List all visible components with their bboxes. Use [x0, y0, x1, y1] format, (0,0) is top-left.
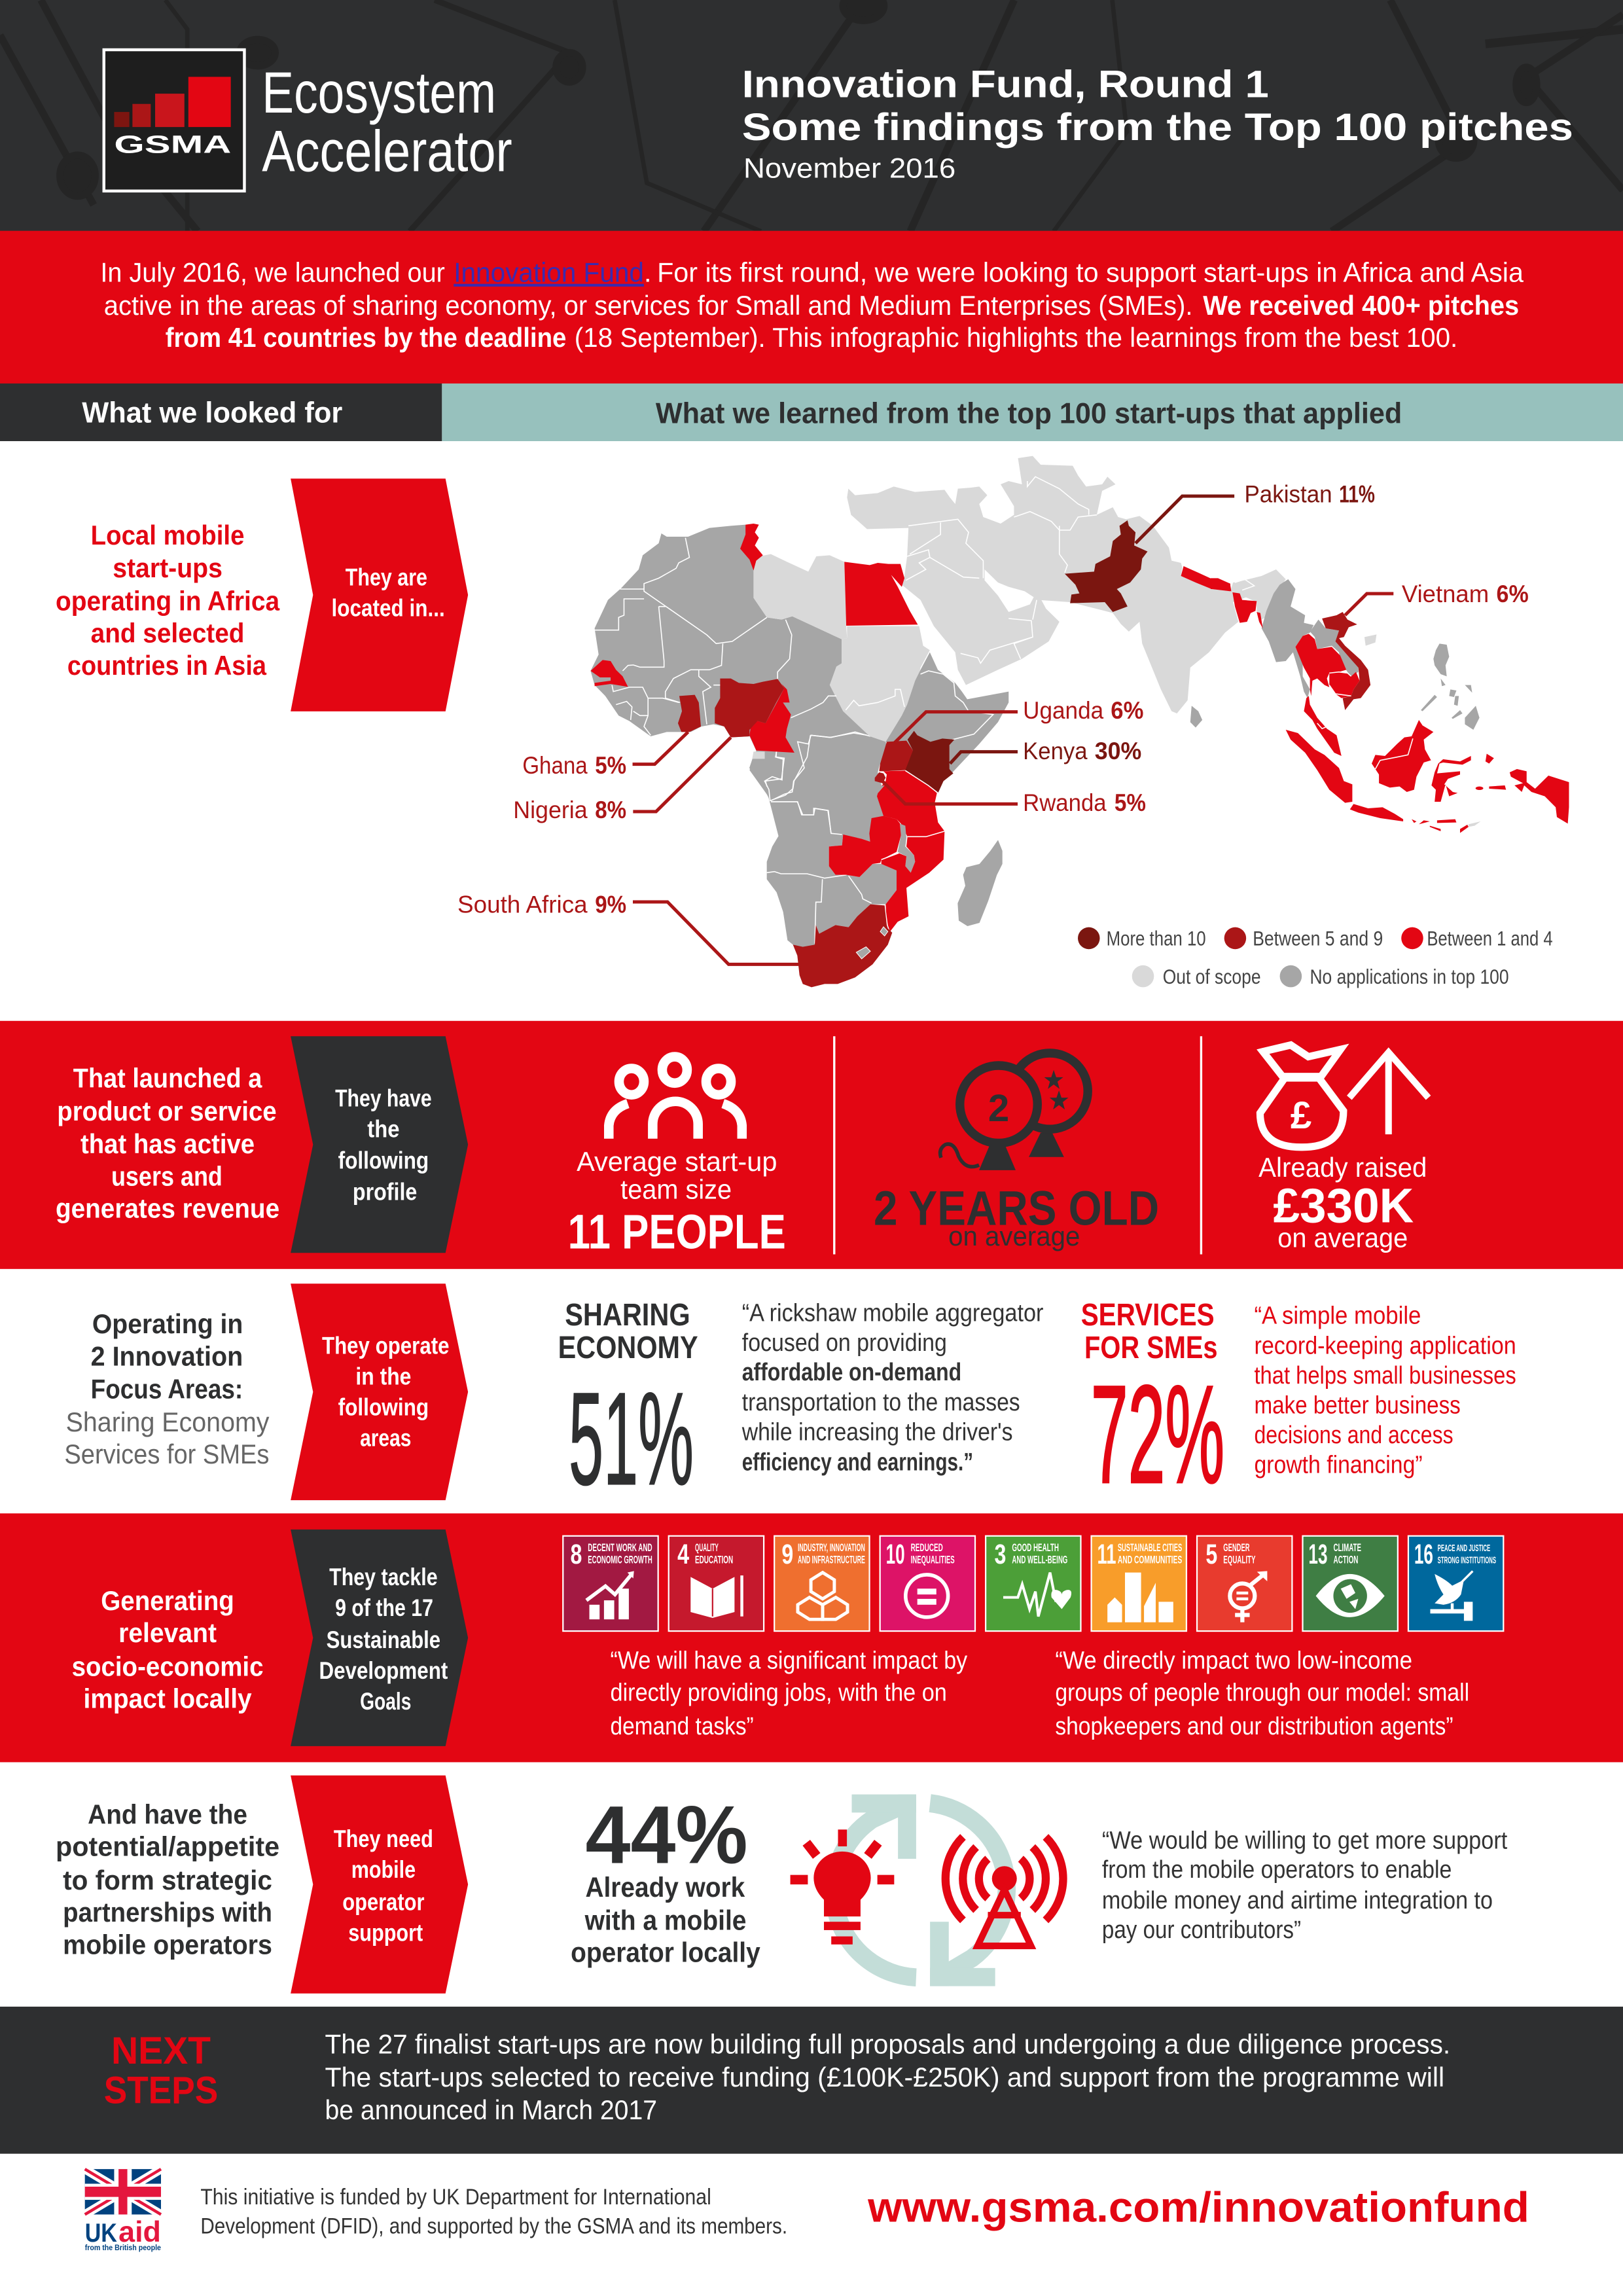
SDG tile 8 — [563, 1536, 658, 1631]
logo: GSMA — [104, 50, 244, 191]
quote: record-keeping application: record-keeping application — [1254, 1333, 1516, 1360]
map: East Africa and Horn — [885, 520, 1230, 774]
stat: already raised: £330K — [1274, 1178, 1414, 1232]
row 3: focus areas — [64, 1283, 1516, 1513]
criterion text: socio-economic impact — [72, 1586, 264, 1714]
next steps text: The 27 finalist start-ups are now building full proposals and undergoing a due diligence process. — [325, 2029, 1450, 2059]
quote: impact by providing jobs: “We will have a significant impact by — [611, 1647, 967, 1674]
SDG tile 3 — [986, 1536, 1080, 1631]
stat: average team size — [568, 1147, 786, 1259]
map: North and West Africa, no applications — [590, 525, 897, 838]
criterion text: partnerships with operators: to form strategic — [63, 1865, 272, 1895]
logo: UK aid: from the British people — [85, 2243, 161, 2252]
quote: record-keeping application: growth financing” — [1254, 1452, 1423, 1479]
logo: GSMA: GSMA — [114, 132, 231, 159]
quote: two low-income groups — [1055, 1647, 1469, 1740]
SDG tile 4: QUALITY — [695, 1541, 719, 1554]
SDG tile 13: 13 — [1308, 1539, 1328, 1570]
stat: 44% — [571, 1789, 760, 1969]
map labels: 8% — [595, 797, 626, 823]
criterion text: launched a product: generates revenue — [56, 1194, 279, 1224]
arrow: they operate in the following areas: in the — [355, 1363, 411, 1390]
criterion text: innovation focus areas: Operating in — [92, 1309, 243, 1339]
SDG tile 16 — [1408, 1536, 1503, 1631]
row 3: focus areas: 72% — [1091, 1357, 1224, 1513]
logo wordmark: Ecosystem Accelerator: Accelerator — [262, 118, 512, 184]
SDG tile 10: 10 — [886, 1539, 905, 1570]
intro band: Innovation Fund — [454, 258, 644, 288]
arrow: they tackle 9 of the 17 goals: They tackle — [329, 1564, 438, 1590]
map legend: More than 10 — [1107, 927, 1206, 950]
quote: two low-income groups: “We directly impact two low-income — [1055, 1647, 1412, 1674]
quote: mobile operators support — [1102, 1827, 1508, 1944]
next steps text: The start-ups selected to receive funding (£100K-£250K) and support from the programme will — [325, 2062, 1444, 2092]
stat: services for SMEs 72% — [1081, 1297, 1224, 1513]
map legend: Between 1 and 4 — [1427, 927, 1553, 950]
quote: mobile operators support: from the mobile operators to enable — [1102, 1856, 1452, 1884]
logo: UK aid: UK — [85, 2218, 117, 2248]
quote: rickshaw aggregator: efficiency and earnings.” — [742, 1449, 973, 1477]
arrow: they have the following profile: the — [367, 1116, 399, 1143]
criterion text: launched a product: that has active — [80, 1129, 255, 1159]
quote: rickshaw aggregator — [741, 1299, 1044, 1477]
quote: record-keeping application — [1254, 1302, 1516, 1479]
quote: record-keeping application: “A simple mobile — [1254, 1302, 1421, 1330]
intro band: active in the areas of sharing economy, or services for Small and Medium Enterprises (SMEs). — [104, 291, 1193, 321]
intro band: . — [644, 258, 651, 288]
arrow: they have the following profile: profile — [353, 1179, 417, 1206]
map labels: Rwanda — [1023, 789, 1107, 816]
map: African countries by application count — [590, 524, 930, 833]
map: Middle East and South Asia, out of scope — [847, 456, 1257, 713]
SDG tile 10 — [880, 1536, 975, 1631]
SDG tile 4 — [669, 1536, 764, 1631]
arrow: they are located in — [291, 478, 468, 711]
criterion text: innovation focus areas: Services for SMEs — [64, 1439, 269, 1469]
arrow: they operate in the following areas: areas — [360, 1424, 411, 1451]
criterion text: innovation focus areas — [64, 1309, 270, 1469]
criterion text: innovation focus areas: Sharing Economy — [66, 1407, 270, 1437]
criterion text: launched a product: product or service — [57, 1096, 277, 1126]
intro band — [0, 231, 1623, 384]
SDG tile 3: GOOD HEALTH — [1012, 1541, 1059, 1554]
criterion text: socio-economic impact: relevant — [118, 1618, 217, 1648]
SDG tile 11: SUSTAINABLE CITIES — [1118, 1541, 1182, 1554]
arrow: they have the following profile: They have — [335, 1085, 432, 1112]
map of Africa and Asia — [590, 456, 1569, 987]
arrow: they have the following profile: following — [338, 1147, 429, 1174]
intro band: (18 September). This infographic highlights the learnings from the best 100. — [575, 323, 1457, 353]
heading: next steps: STEPS — [104, 2069, 218, 2111]
stat: already raised: on average — [1277, 1223, 1408, 1253]
SDG tile 16: PEACE AND JUSTICE — [1438, 1543, 1490, 1554]
stat: 44%: Already work — [585, 1873, 745, 1903]
row 4: sustainable development goals — [0, 1513, 1623, 1762]
criterion text: partnerships with operators: And have the — [88, 1799, 247, 1829]
arrow: they need mobile operator support — [291, 1776, 468, 1994]
quote: mobile operators support: mobile money and airtime integration to — [1102, 1887, 1493, 1914]
stat: 44%: with a mobile — [584, 1905, 746, 1936]
criterion text: innovation focus areas: 2 Innovation — [91, 1341, 243, 1371]
map labels: 30% — [1095, 738, 1141, 764]
SDG tile 5 — [1197, 1536, 1292, 1631]
row 5: partnerships — [56, 1776, 1508, 1994]
quote: rickshaw aggregator: transportation to the masses — [742, 1389, 1020, 1416]
funding statement: This initiative is funded by UK Department for International — [200, 2185, 711, 2210]
intro band: In July 2016, we launched our — [100, 258, 445, 288]
criterion text: launched a product — [56, 1064, 279, 1224]
arrow: they are located in: They are — [346, 564, 427, 590]
SDG tile 8: 8 — [570, 1539, 582, 1570]
quote: rickshaw aggregator: while increasing the driver's — [741, 1418, 1012, 1446]
arrow: they tackle 9 of the 17 goals: Sustainable — [327, 1626, 440, 1653]
arrow: they have the following profile — [291, 1036, 468, 1253]
SDG tile 9: 9 — [781, 1539, 793, 1570]
stat: 44%: operator locally — [571, 1938, 760, 1969]
map labels: Ghana — [522, 752, 588, 779]
section header: what we looked for: What we looked for — [82, 397, 342, 429]
icon: two balloons: 2 — [988, 1087, 1009, 1130]
stat: services for SMEs 72%: SERVICES — [1081, 1297, 1215, 1333]
SDG tile 11: AND COMMUNITIES — [1118, 1553, 1182, 1566]
quote: two low-income groups: shopkeepers and our distribution agents” — [1055, 1713, 1454, 1740]
criterion text: local mobile start-ups — [56, 520, 280, 681]
criterion text: local mobile start-ups: operating in Africa — [56, 586, 280, 617]
row 3: focus areas: 51% — [569, 1365, 694, 1513]
criterion text: partnerships with operators: mobile operators — [63, 1929, 272, 1960]
map labels: Nigeria — [513, 797, 588, 823]
SDG tile 16: 16 — [1414, 1539, 1433, 1570]
quote: record-keeping application: make better business — [1254, 1391, 1461, 1419]
SDG tile 11 — [1092, 1536, 1186, 1631]
row 2: profile — [0, 1021, 1623, 1269]
SDG tile 9: INDUSTRY, INNOVATION — [798, 1541, 865, 1554]
map legend: No applications in top 100 — [1310, 965, 1509, 988]
map legend: Out of scope — [1163, 965, 1261, 988]
map labels: 6% — [1111, 697, 1143, 724]
stat: already raised: Already raised — [1258, 1153, 1427, 1183]
funding statement: Development (DFID), and supported by the GSMA and its members. — [200, 2214, 787, 2239]
SDG tile 10: INEQUALITIES — [911, 1553, 955, 1566]
stat: sharing economy 51%: ECONOMY — [558, 1330, 698, 1365]
next steps text — [325, 2029, 1450, 2125]
logo: UK aid: aid — [118, 2216, 161, 2248]
quote: mobile operators support: pay our contributors” — [1102, 1916, 1301, 1944]
map leader lines — [633, 496, 1393, 964]
map: Central and Southern Africa, no applications — [749, 694, 1003, 949]
map labels: 5% — [1115, 789, 1146, 816]
criterion text: local mobile start-ups: countries in Asia — [67, 651, 267, 681]
map labels — [457, 481, 1529, 918]
SDG tile 5: EQUALITY — [1223, 1553, 1255, 1566]
icon: three people — [609, 1057, 742, 1139]
map labels: 5% — [595, 752, 626, 779]
arrow: they operate in the following areas: following — [338, 1393, 429, 1420]
SDG tile 4: 4 — [677, 1539, 689, 1570]
SDG tile 8: DECENT WORK AND — [588, 1541, 652, 1554]
SDG tile 11: 11 — [1097, 1539, 1116, 1570]
section header: what we learned — [442, 384, 1623, 441]
heading: next steps: NEXT — [111, 2030, 211, 2072]
quote: impact by providing jobs: directly providing jobs, with the on — [611, 1679, 947, 1707]
logo wordmark: Ecosystem Accelerator — [262, 60, 512, 184]
arrow: they need mobile operator support: support — [348, 1919, 423, 1946]
SDG tile 10: REDUCED — [911, 1541, 943, 1554]
stat: average team size: team size — [620, 1174, 732, 1204]
next steps text: be announced in March 2017 — [325, 2095, 657, 2125]
arrow: they tackle 9 of the 17 goals — [291, 1530, 468, 1746]
SDG tile 3: 3 — [995, 1539, 1006, 1570]
SDG tile 9: AND INFRASTRUCTURE — [798, 1553, 865, 1566]
quote: impact by providing jobs: demand tasks” — [611, 1713, 754, 1740]
map labels: Kenya — [1023, 738, 1088, 764]
title: Some findings from the Top 100 pitches — [742, 106, 1573, 149]
arrow: they need mobile operator support: mobile — [351, 1856, 416, 1883]
arrow: they tackle 9 of the 17 goals: Development — [319, 1657, 448, 1684]
icon: light bulb — [791, 1829, 894, 1945]
criterion text: launched a product: users and — [111, 1161, 223, 1191]
stat: services for SMEs 72%: FOR SMEs — [1084, 1330, 1218, 1365]
SDG tile 13 — [1302, 1536, 1398, 1631]
quote: rickshaw aggregator: focused on providing — [742, 1329, 947, 1357]
SDG tile 8: ECONOMIC GROWTH — [588, 1553, 652, 1566]
quote: rickshaw aggregator: affordable on-demand — [742, 1359, 961, 1386]
quote: two low-income groups: groups of people through our model: small — [1055, 1679, 1469, 1707]
SDG tile 9 — [774, 1536, 870, 1631]
logo: UK aid — [85, 2169, 161, 2252]
stat: average team size: Average start-up — [577, 1147, 777, 1177]
quote: impact by providing jobs — [611, 1647, 967, 1740]
title: Innovation Fund, Round 1 — [742, 63, 1269, 105]
stat: already raised — [1258, 1153, 1427, 1253]
SDG tile 16: STRONG INSTITUTIONS — [1438, 1555, 1496, 1566]
quote: rickshaw aggregator: “A rickshaw mobile aggregator — [742, 1299, 1044, 1327]
quote: mobile operators support: “We would be willing to get more support — [1102, 1827, 1508, 1854]
criterion text: innovation focus areas: Focus Areas: — [91, 1374, 243, 1405]
icon: money bag and up arrow — [1260, 1045, 1429, 1147]
map labels: 6% — [1497, 581, 1529, 607]
section header: what we looked for — [0, 384, 442, 441]
map legend — [1078, 927, 1553, 988]
stat: two years old: 2 YEARS OLD — [874, 1181, 1159, 1236]
map legend: Between 5 and 9 — [1253, 927, 1383, 950]
intro band: For its first round, we were looking to support start-ups in Africa and Asia — [657, 258, 1524, 288]
icon: two balloons — [940, 1053, 1088, 1170]
SDG tile 13: ACTION — [1333, 1553, 1358, 1566]
map labels: Pakistan — [1244, 481, 1332, 508]
criterion text: socio-economic impact: socio-economic — [72, 1652, 264, 1682]
stat: average team size: 11 PEOPLE — [568, 1205, 786, 1259]
criterion text: partnerships with operators: partnerships with — [63, 1897, 272, 1928]
quote: record-keeping application: that helps small businesses — [1254, 1362, 1516, 1390]
map labels: Vietnam — [1402, 581, 1489, 607]
arrow: they need mobile operator support: operator — [342, 1888, 425, 1915]
criterion text: partnerships with operators: potential/appetite — [56, 1832, 279, 1862]
arrow: they need mobile operator support: They need — [334, 1825, 433, 1852]
SDG tile 5: 5 — [1205, 1539, 1217, 1570]
map labels: Uganda — [1023, 697, 1104, 724]
title — [742, 63, 1573, 184]
map: Southern Africa countries — [793, 731, 954, 987]
map labels: 9% — [595, 891, 626, 918]
SDG tile 4: EDUCATION — [695, 1553, 733, 1566]
criterion text: partnerships with operators — [56, 1799, 279, 1960]
header banner — [0, 0, 1623, 231]
criterion text: local mobile start-ups: and selected — [91, 619, 244, 649]
stat: sharing economy 51% — [558, 1297, 698, 1513]
arrow: they tackle 9 of the 17 goals: Goals — [360, 1688, 411, 1715]
criterion text: socio-economic impact: impact locally — [83, 1684, 252, 1714]
arrow: they tackle 9 of the 17 goals: 9 of the 17 — [335, 1594, 433, 1621]
intro band: We received 400+ pitches — [1203, 291, 1519, 321]
arrow: they operate in the following areas — [291, 1283, 468, 1500]
SDG tile 13: CLIMATE — [1333, 1541, 1361, 1554]
SDG tile 3: AND WELL-BEING — [1012, 1553, 1067, 1566]
heading: next steps — [104, 2030, 218, 2111]
criterion text: launched a product: That launched a — [73, 1064, 262, 1094]
title: November 2016 — [743, 153, 955, 184]
map labels: South Africa — [457, 891, 588, 918]
logo wordmark: Ecosystem Accelerator: Ecosystem — [262, 60, 496, 125]
funding statement — [200, 2185, 787, 2239]
stat: 44%: 44% — [585, 1789, 748, 1881]
website url: www.gsma.com/innovationfund — [867, 2183, 1529, 2231]
map labels: 11% — [1339, 481, 1375, 508]
icon: mobile antenna — [946, 1837, 1063, 1946]
quote: record-keeping application: decisions and access — [1254, 1422, 1454, 1449]
criterion text: socio-economic impact: Generating — [101, 1586, 234, 1616]
footer — [85, 2169, 1529, 2252]
icon: money bag and up arrow: £ — [1291, 1094, 1311, 1137]
intro band: from 41 countries by the deadline — [166, 323, 566, 353]
arrow: they are located in: located in... — [332, 594, 445, 621]
SDG tile 5: GENDER — [1223, 1541, 1250, 1554]
map: South East Asia — [1211, 569, 1569, 833]
criterion text: local mobile start-ups: start-ups — [113, 553, 223, 583]
section header: what we learned: What we learned from the top 100 start-ups that applied — [656, 397, 1402, 429]
icon: cycle arrows — [834, 1795, 1007, 1986]
stat: sharing economy 51%: SHARING — [565, 1297, 690, 1333]
criterion text: local mobile start-ups: Local mobile — [91, 520, 244, 550]
stat: two years old: on average — [948, 1221, 1080, 1251]
next steps band — [0, 2007, 1623, 2154]
arrow: they operate in the following areas: They operate — [322, 1333, 450, 1359]
row 1: location — [56, 456, 1569, 988]
